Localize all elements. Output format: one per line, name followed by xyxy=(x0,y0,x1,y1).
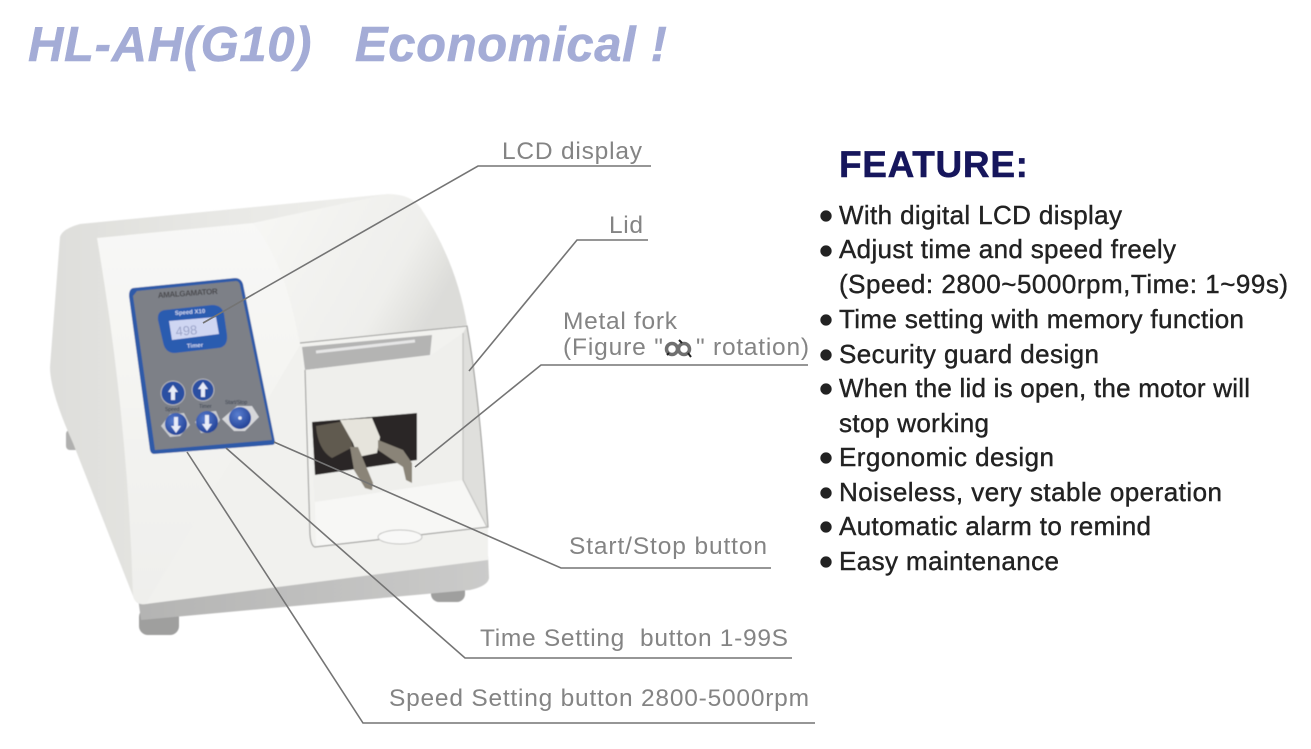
time down button xyxy=(195,411,220,433)
lid hinge recess xyxy=(302,335,432,370)
product photo: amalgamator xyxy=(50,194,489,635)
lower front deck xyxy=(146,325,488,604)
label: metal fork: (Figure " xyxy=(563,334,663,361)
button captions: Start/Stop xyxy=(225,400,247,406)
label: time setting button: Time Setting button 1-99S xyxy=(480,625,788,652)
machine feet xyxy=(66,430,465,635)
machine left side xyxy=(50,194,388,604)
feature 7: Noiseless, very stable operation xyxy=(839,477,1222,507)
LCD display: Speed X10 xyxy=(175,309,206,317)
lid finger notch xyxy=(378,530,422,544)
leader line: lid xyxy=(469,240,648,371)
LCD display xyxy=(158,305,227,353)
feature 2 xyxy=(820,234,1288,299)
feature 8: Automatic alarm to remind xyxy=(839,511,1151,541)
button captions: Timer xyxy=(199,404,212,410)
feature 9: Easy maintenance xyxy=(839,546,1059,576)
feature 2: (Speed: 2800~5000rpm,Time: 1~99s) xyxy=(839,269,1288,299)
label: lid: Lid xyxy=(609,212,643,239)
feature 5 xyxy=(820,373,1250,438)
fork mechanism xyxy=(316,418,412,490)
feature 1: With digital LCD display xyxy=(839,200,1122,230)
LCD display: 498 xyxy=(175,322,198,339)
feature 4: Security guard design xyxy=(839,339,1099,369)
machine top hood xyxy=(253,194,467,345)
lid interior xyxy=(300,326,488,547)
machine base xyxy=(138,555,489,620)
panel heading: AMALGAMATOR xyxy=(158,287,218,300)
control panel xyxy=(129,278,275,454)
feature 2: Adjust time and speed freely xyxy=(839,234,1176,264)
leader line: time setting button xyxy=(226,448,792,658)
label: speed setting button: Speed Setting button 2800-5000rpm xyxy=(389,685,809,712)
time up button xyxy=(192,379,214,401)
leader line: metal fork xyxy=(415,365,808,467)
title: HL-AH(G10) Economical ! xyxy=(28,18,667,72)
feature 3: Time setting with memory function xyxy=(839,304,1244,334)
label: LCD display: LCD display xyxy=(502,138,643,165)
label: start stop button: Start/Stop button xyxy=(569,533,767,560)
leader line: speed setting button xyxy=(187,452,815,723)
lid inner edges xyxy=(463,333,487,527)
label: metal fork: " rotation) xyxy=(696,334,809,361)
right wall shade xyxy=(463,326,488,527)
button captions xyxy=(165,400,247,413)
chamber opening xyxy=(312,413,417,475)
inner cover xyxy=(305,333,463,502)
start stop button xyxy=(222,406,259,431)
speed down button xyxy=(161,413,190,437)
lid floor xyxy=(315,480,487,546)
leader line: start stop button xyxy=(274,442,771,568)
transparent lid outline xyxy=(300,326,488,547)
label: metal fork: Metal fork xyxy=(563,308,678,335)
feature 5: When the lid is open, the motor will xyxy=(839,373,1250,403)
feature list xyxy=(820,200,1288,576)
heading: feature: FEATURE: xyxy=(839,144,1028,185)
button captions: Speed xyxy=(165,407,180,413)
feature 6: Ergonomic design xyxy=(839,442,1054,472)
machine front face xyxy=(97,223,318,604)
leader line: LCD display xyxy=(203,166,651,323)
LCD display: Timer xyxy=(187,343,204,350)
feature 5: stop working xyxy=(839,408,989,438)
mixing chamber window xyxy=(300,326,488,547)
label: metal fork xyxy=(563,308,809,361)
speed up button xyxy=(161,381,185,405)
icon: figure eight rotation xyxy=(666,340,691,357)
